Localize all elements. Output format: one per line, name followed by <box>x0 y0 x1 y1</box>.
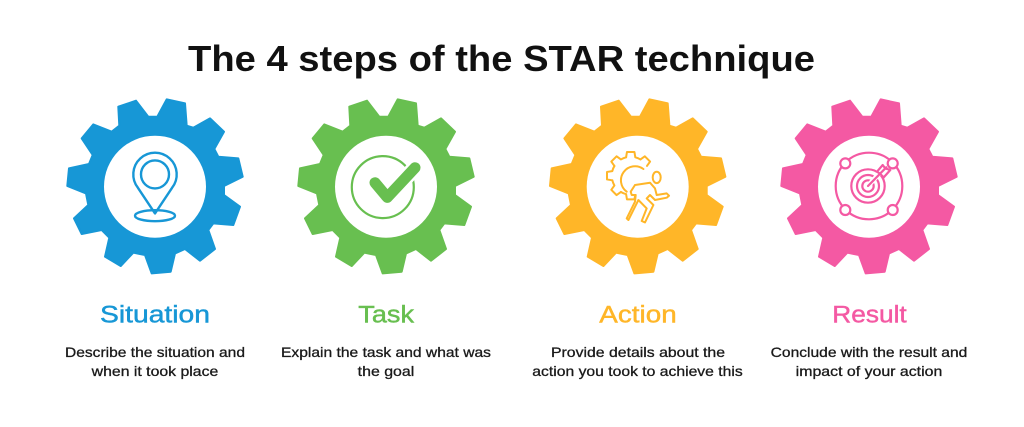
icon: blue gear with location pin <box>67 99 243 273</box>
text: action description <box>532 344 743 379</box>
text: result description: Conclude with the result and <box>771 344 967 360</box>
text: situation description: Describe the situation and <box>65 344 245 360</box>
text: action description: Provide details about the <box>551 344 725 360</box>
icon: green gear with check mark <box>298 99 474 273</box>
text: result description: impact of your action <box>796 363 942 379</box>
text: situation description <box>65 344 245 379</box>
text: task description: the goal <box>358 363 414 379</box>
icon: yellow gear with runner <box>550 99 725 273</box>
panel: situation <box>65 99 245 379</box>
heading: result: Result <box>832 302 907 328</box>
text: situation description: when it took place <box>91 363 219 379</box>
text: result description <box>771 344 967 379</box>
panel: task <box>281 99 491 379</box>
text: action description: action you took to achieve this <box>532 363 743 379</box>
heading: situation: Situation <box>100 302 210 328</box>
icon: pink gear with target <box>781 99 957 273</box>
heading: action: Action <box>599 302 677 328</box>
heading: task: Task <box>358 302 415 328</box>
panel: action <box>532 99 743 379</box>
text: task description: Explain the task and what was <box>281 344 491 360</box>
text: task description <box>281 344 491 379</box>
title: The 4 steps of the STAR technique <box>188 38 815 79</box>
panel: result <box>771 99 967 379</box>
